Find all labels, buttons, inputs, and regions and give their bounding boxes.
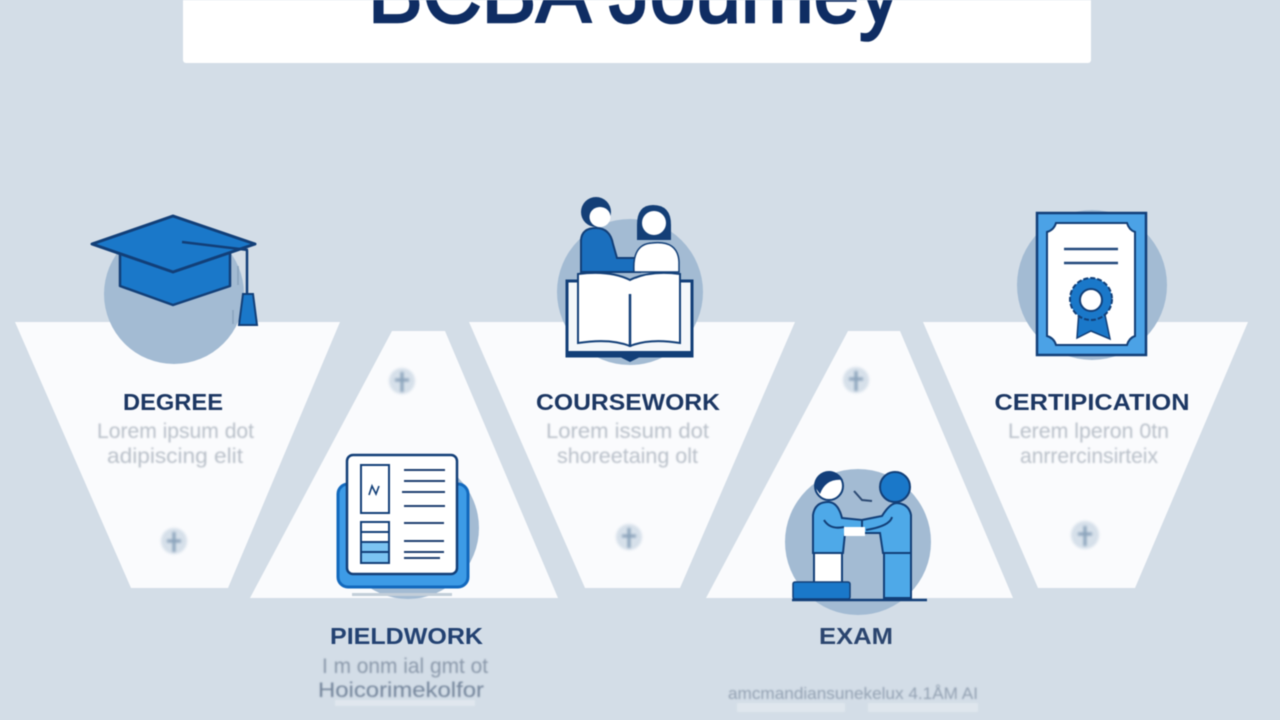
heading: fieldwork: PIELDWORK: [330, 623, 483, 649]
text: fieldwork description: [318, 655, 488, 706]
panel: exam: [706, 331, 1013, 712]
icon: certificate: [1017, 210, 1167, 360]
icon: certification small glyph: [1071, 521, 1099, 549]
text: certification description: [1008, 420, 1169, 468]
icon: degree small glyph: [161, 528, 187, 554]
heading: degree: DEGREE: [123, 389, 223, 415]
text: certification description: Lerem lperon 0tn: [1008, 420, 1169, 443]
heading: exam: EXAM: [819, 623, 893, 649]
heading: certification: CERTIPICATION: [994, 389, 1190, 415]
text: coursework description: [546, 420, 709, 468]
text: degree description: Lorem ipsum dot: [97, 420, 254, 443]
icon: coursework small glyph: [616, 524, 642, 550]
panel: coursework: [469, 197, 795, 588]
icon: fieldwork report: [337, 455, 479, 599]
icon: exam small glyph: [843, 367, 869, 393]
heading: coursework: COURSEWORK: [536, 389, 720, 415]
icon: fieldwork small glyph: [389, 368, 415, 394]
panel: fieldwork: [250, 331, 558, 706]
text: fieldwork description: Hoicorimekolfor: [318, 679, 484, 702]
text: exam description: amcmandiansunekelux 4.1ÅM AI: [728, 684, 978, 703]
text: degree description: adipiscing elit: [107, 445, 243, 468]
icon: handshake: [785, 469, 931, 615]
icon: people with open book: [557, 197, 703, 365]
panel: degree: [15, 216, 340, 588]
text: certification description: anrrercinsirteix: [1020, 445, 1158, 468]
panel: certification: [923, 210, 1248, 588]
title banner: [183, 0, 1091, 63]
icon: graduation cap: [92, 216, 257, 364]
text: fieldwork description: I m onm ial gmt ot: [322, 655, 488, 678]
text: exam description: [728, 684, 978, 712]
text: degree description: [97, 420, 254, 468]
text: coursework description: Lorem issum dot: [546, 420, 709, 443]
text: coursework description: shoreetaing olt: [557, 445, 698, 468]
